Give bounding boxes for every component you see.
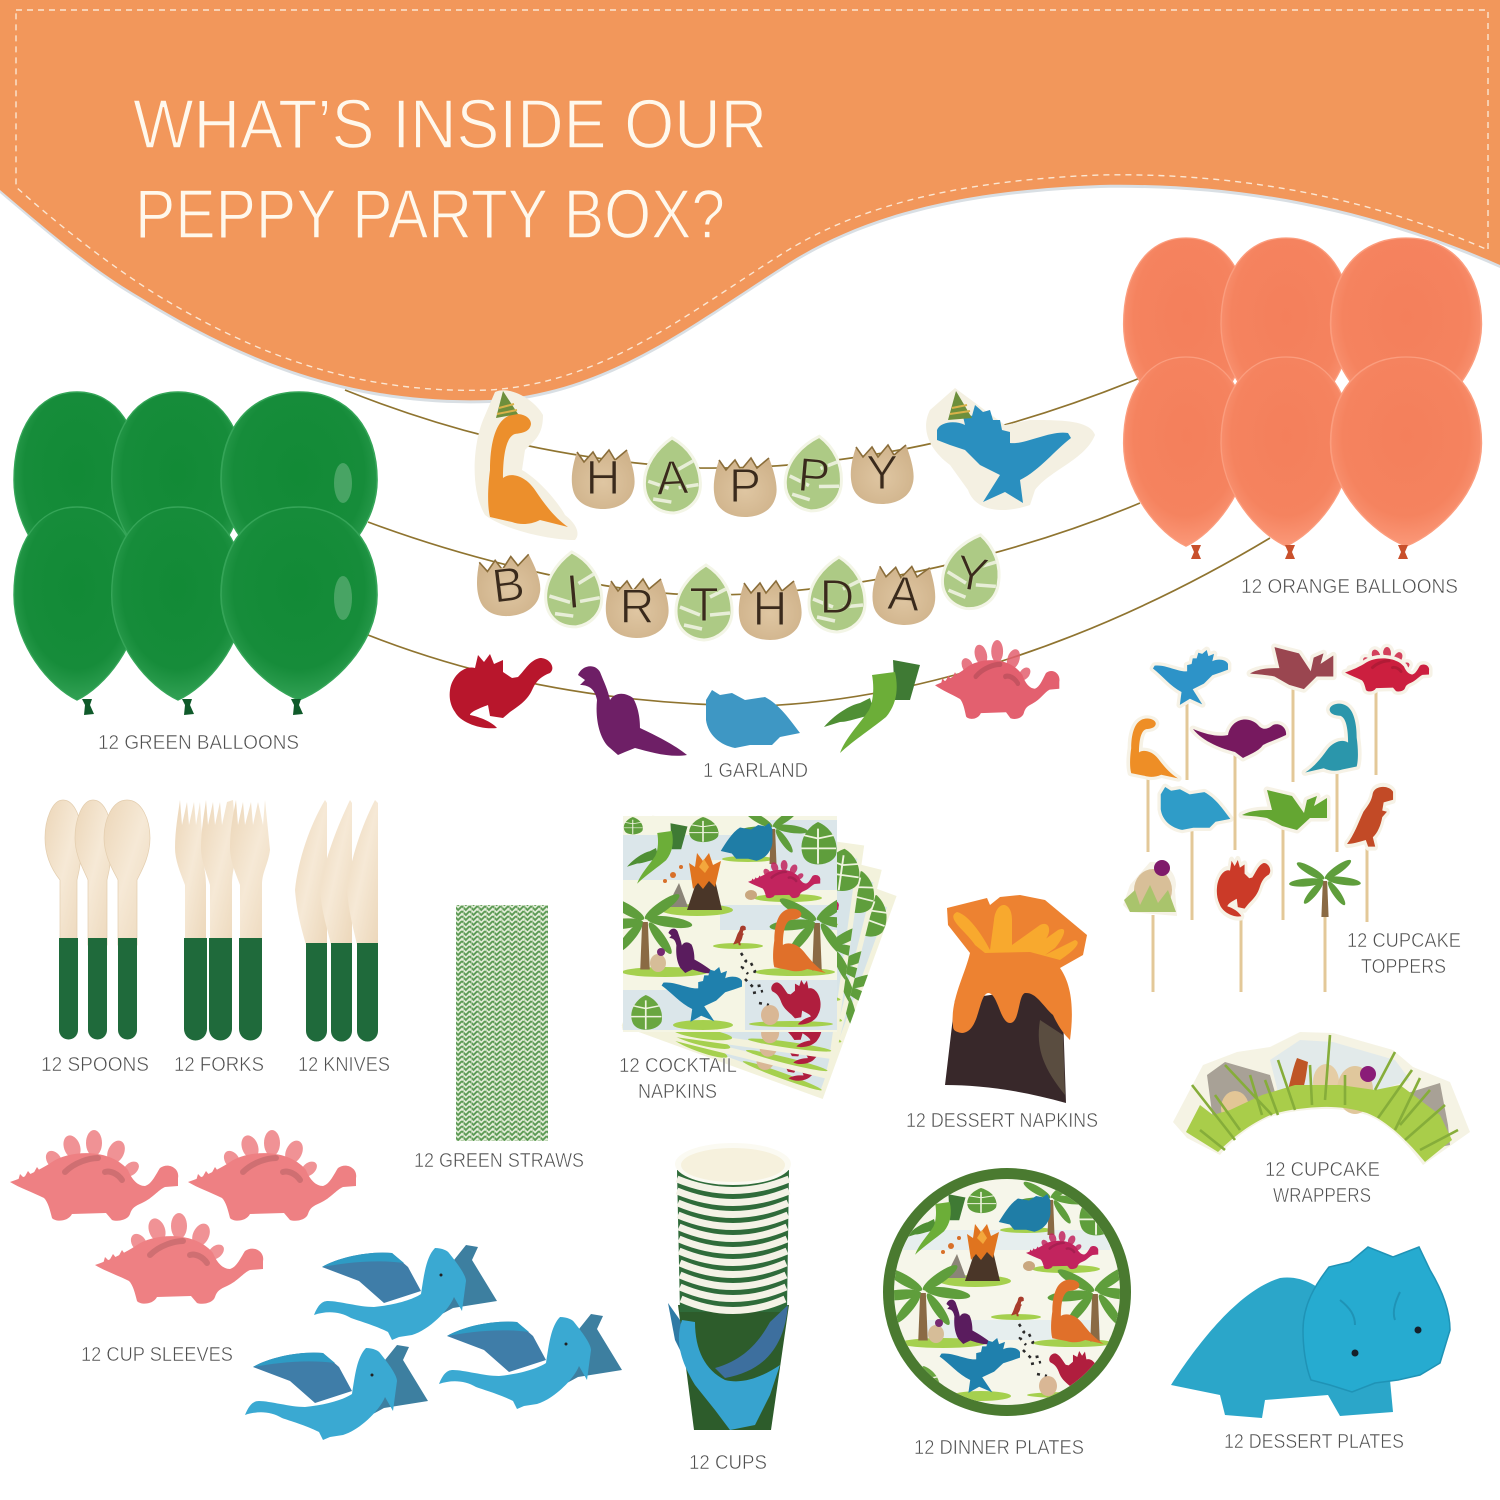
- label: cups: 12 CUPS: [689, 1452, 767, 1474]
- knives: [295, 800, 378, 1042]
- party blue dino: [926, 388, 1095, 510]
- letters birthday: H: [753, 583, 787, 636]
- forks: [175, 800, 270, 1040]
- labels: cutlery: 12 FORKS: [174, 1054, 264, 1076]
- labels: balloons and garland: 12 ORANGE BALLOONS: [1241, 576, 1458, 598]
- green balloons: [14, 392, 377, 715]
- letters happy: H: [586, 452, 620, 505]
- label: cupcake toppers: [1347, 930, 1461, 978]
- title: [133, 85, 767, 253]
- label: dessert plates: 12 DESSERT PLATES: [1224, 1431, 1404, 1453]
- cupcake toppers: [1123, 647, 1429, 992]
- letters birthday: [474, 530, 1006, 640]
- title: PEPPY PARTY BOX?: [135, 175, 725, 253]
- garland: happy birthday banners: [474, 388, 1095, 640]
- labels: balloons and garland: 12 GREEN BALLOONS: [98, 732, 299, 754]
- cup sleeves: pterodactyls: [245, 1245, 622, 1440]
- title: WHAT’S INSIDE OUR: [133, 85, 767, 163]
- label: cupcake wrappers: WRAPPERS: [1273, 1185, 1371, 1207]
- label: straws: 12 GREEN STRAWS: [414, 1150, 584, 1172]
- labels: balloons and garland: [98, 576, 1458, 782]
- cupcake wrappers: [1173, 1032, 1470, 1165]
- label: cocktail napkins: NAPKINS: [638, 1081, 717, 1103]
- labels: cutlery: [41, 1054, 390, 1076]
- letters birthday: I: [564, 566, 582, 619]
- spoons: [45, 800, 150, 1040]
- labels: cutlery: 12 SPOONS: [41, 1054, 149, 1076]
- letters happy: P: [729, 460, 761, 513]
- label: dinner plates: 12 DINNER PLATES: [914, 1437, 1084, 1459]
- letters birthday: R: [620, 581, 654, 634]
- header banner: [0, 0, 1500, 403]
- garland: dinosaurs row: [450, 640, 1059, 756]
- letters happy: A: [655, 451, 690, 506]
- dessert plates: [1171, 1247, 1450, 1418]
- letters birthday: D: [820, 571, 854, 624]
- letters happy: P: [796, 449, 832, 504]
- letters birthday: T: [689, 579, 719, 632]
- label: cupcake toppers: 12 CUPCAKE: [1347, 930, 1461, 952]
- garland strings: [345, 378, 1270, 706]
- labels: cutlery: 12 KNIVES: [298, 1054, 390, 1076]
- label: cupcake wrappers: [1265, 1159, 1380, 1207]
- label: dessert napkins: 12 DESSERT NAPKINS: [906, 1110, 1098, 1132]
- labels: balloons and garland: 1 GARLAND: [703, 760, 808, 782]
- dessert napkins: [945, 895, 1087, 1103]
- label: cup sleeves: 12 CUP SLEEVES: [81, 1344, 233, 1366]
- orange balloons: [1124, 238, 1481, 559]
- label: cupcake wrappers: 12 CUPCAKE: [1265, 1159, 1380, 1181]
- label: cocktail napkins: 12 COCKTAIL: [619, 1055, 737, 1077]
- letters birthday: B: [489, 557, 527, 614]
- letters happy: Y: [866, 447, 898, 500]
- cups: [668, 1143, 791, 1430]
- green straws: [456, 905, 548, 1141]
- label: cupcake toppers: TOPPERS: [1361, 956, 1446, 978]
- letters birthday: Y: [951, 546, 992, 603]
- label: cocktail napkins: [619, 1055, 737, 1103]
- cocktail napkins: [622, 816, 896, 1099]
- party bronto: [475, 390, 578, 540]
- cup sleeves: stegosaurus: [10, 1130, 356, 1304]
- letters happy: [572, 434, 914, 517]
- dinner plate: [875, 1168, 1143, 1416]
- letters birthday: A: [886, 567, 922, 622]
